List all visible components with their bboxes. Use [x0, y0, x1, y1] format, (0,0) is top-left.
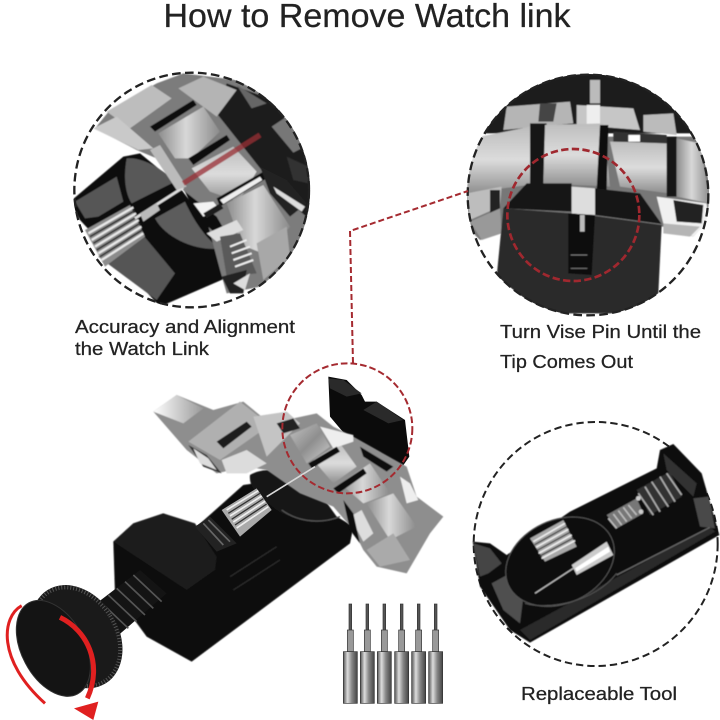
threaded screw — [90, 570, 167, 637]
caption: the watch link: the Watch Link — [75, 339, 210, 359]
photo: watch bracelet on tool — [70, 73, 313, 307]
dashed circle outline — [474, 422, 718, 666]
bracelet strap and clasp — [153, 395, 443, 573]
tool body — [113, 470, 353, 662]
panel: turn vise pin detail — [460, 70, 720, 315]
red dashed highlight circle — [282, 363, 412, 493]
dashed circle outline — [468, 75, 708, 315]
caption: replaceable tool: Replaceable Tool — [521, 684, 677, 704]
set of replacement pins — [343, 604, 443, 703]
photo: tool with disc and spare pin — [473, 444, 719, 643]
caption: turn vise pin: Turn Vise Pin Until the — [500, 322, 701, 342]
caption: accuracy and alignment: Accuracy and Alignment — [75, 317, 295, 337]
dashed circle outline — [74, 73, 309, 307]
black jaws — [328, 377, 409, 470]
pin 2 — [360, 604, 374, 703]
inner red dashed circle — [507, 149, 639, 281]
pin 3 — [377, 604, 391, 703]
photo: tool head under bracelet — [460, 70, 720, 313]
knurled knob and pin — [195, 467, 315, 552]
adjustment thumb wheel — [1, 568, 141, 709]
pin 6 — [429, 604, 443, 703]
pin 4 — [395, 604, 409, 703]
caption: tip comes out: Tip Comes Out — [500, 352, 633, 372]
panel: replaceable tool detail — [473, 422, 719, 666]
pin 5 — [412, 604, 426, 703]
panel: main tool illustration — [1, 363, 443, 720]
red dashed connector — [350, 191, 468, 363]
rotation arrow — [7, 606, 98, 720]
panel: accuracy and alignment detail — [70, 73, 313, 307]
pin 1 — [343, 604, 357, 703]
